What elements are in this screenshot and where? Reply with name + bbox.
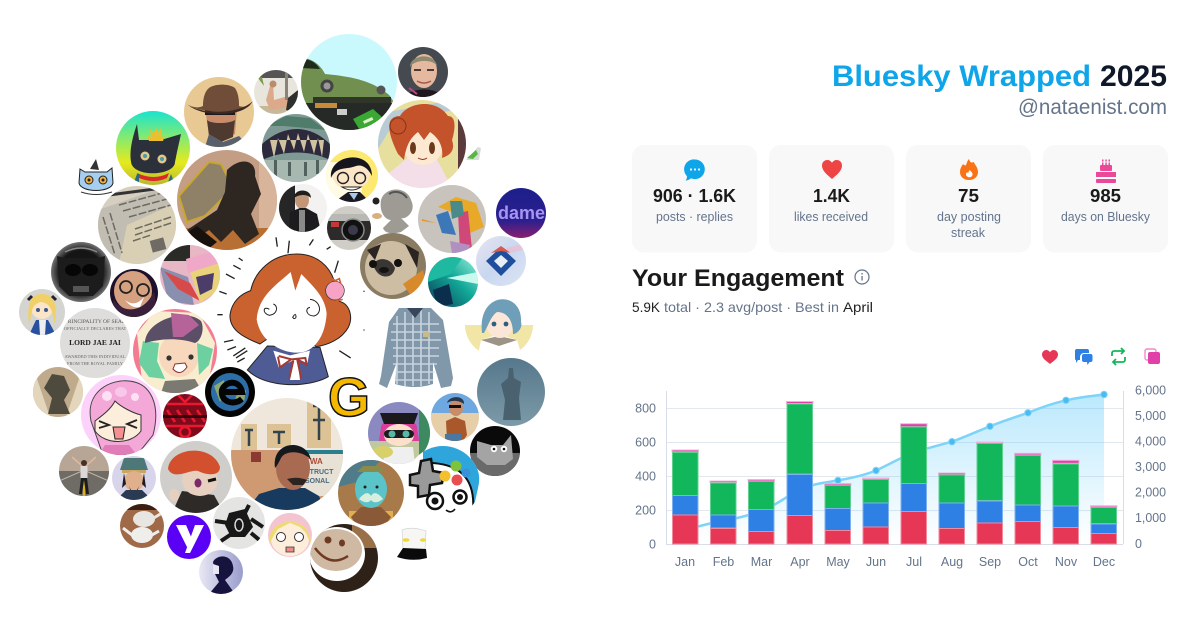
panel: days on Bluesky	[1043, 145, 1168, 252]
avatar: paper certificate: PRINCIPALITY OF SEAL	[65, 319, 126, 325]
avatar: magazines	[160, 245, 220, 305]
sticker: grey creature	[372, 190, 413, 233]
avatar: zhuge warrior	[112, 456, 156, 500]
heading: Your Engagement: Your Engagement	[632, 265, 844, 292]
label line 2: streak	[951, 225, 985, 240]
stacked bars: likes	[672, 512, 1116, 544]
left axis labels: 200	[635, 504, 656, 518]
panel: day posting streak	[906, 145, 1031, 252]
icon: reposts arrows	[1112, 348, 1125, 365]
avatar: smiley coffee	[309, 524, 378, 592]
avatar: cowboy	[184, 77, 254, 147]
avatar: blonde shocked anime	[268, 513, 312, 557]
icon: heart	[822, 160, 842, 179]
icon: replies chat	[1075, 349, 1092, 365]
avatar: red hat figure	[160, 441, 232, 513]
month labels: Feb	[713, 555, 734, 569]
avatar: teapots	[120, 504, 164, 548]
avatar: blonde anime	[19, 289, 65, 335]
cumulative area	[685, 394, 1104, 544]
right axis labels: 0	[1135, 537, 1142, 551]
label: days on Bluesky	[1061, 209, 1150, 224]
month labels: Jan	[675, 555, 695, 569]
avatar: film director photo: SONAL	[305, 478, 330, 485]
avatar: man on highway	[59, 446, 109, 496]
avatar: dark portrait	[199, 550, 243, 594]
icon: info	[855, 270, 869, 284]
panel: likes received	[769, 145, 894, 252]
right axis labels: 6,000	[1135, 384, 1166, 398]
avatar: pixel cat in dark	[470, 426, 520, 477]
stacked bars: quotes	[672, 402, 1117, 507]
value: 906 · 1.6K	[653, 186, 736, 206]
avatar: pink hair anime	[81, 375, 161, 455]
item: plaid shirt	[379, 308, 453, 388]
cumulative line	[685, 394, 1104, 530]
avatar: statue	[33, 367, 83, 417]
avatar: paper certificate: OFFICIALLY DECLARES THAT	[64, 326, 127, 331]
title: 2025	[1100, 60, 1167, 93]
left axis labels: 400	[635, 470, 656, 484]
month labels: Oct	[1018, 555, 1038, 569]
icon: quotes squares	[1145, 349, 1160, 364]
left axis labels: 600	[635, 436, 656, 450]
month labels: Jul	[906, 555, 922, 569]
month labels: Jun	[866, 555, 886, 569]
month labels: May	[826, 555, 851, 569]
line points	[835, 391, 1107, 484]
right axis labels: 1,000	[1135, 511, 1166, 525]
avatar: glasses chibi	[326, 150, 378, 202]
sticker: small green leaf	[466, 147, 481, 160]
stacked bars: replies	[672, 474, 1116, 534]
handle: @nataenist.com	[1018, 96, 1167, 119]
stacked bars: reposts	[672, 404, 1116, 524]
panel: posts and replies	[632, 145, 757, 252]
left axis labels: 800	[635, 402, 656, 416]
engagement chart	[635, 384, 1166, 569]
avatar: masked splat girl	[368, 402, 430, 464]
left axis labels: 0	[649, 538, 656, 552]
avatar: dame logo: dame	[498, 203, 545, 223]
value: 985	[1090, 186, 1121, 206]
label: posts · replies	[656, 209, 733, 224]
avatar: paper certificate: LORD JAE JAI	[69, 338, 121, 347]
avatar: teal abstract	[428, 257, 478, 307]
avatar: earth e	[205, 367, 255, 417]
avatar: blue mustache character	[338, 460, 404, 526]
avatar: film director photo	[231, 398, 343, 510]
label: likes received	[794, 209, 868, 224]
month labels: Aug	[941, 555, 963, 569]
avatar: controller face	[408, 446, 480, 513]
avatar: paper certificate: FROM THE ROYAL FAMILY	[67, 361, 124, 366]
avatar: smiling man with glasses	[110, 269, 158, 317]
avatar: black skull helmet	[51, 242, 111, 302]
sticker: white ghost	[397, 528, 427, 560]
avatar: redhead anime	[378, 100, 466, 188]
avatar: paper certificate	[60, 308, 130, 378]
engagement summary: 5.9K	[632, 299, 661, 315]
value: 75	[958, 186, 979, 206]
avatar: cat with crown	[116, 111, 190, 185]
month labels: Mar	[751, 555, 772, 569]
icon: cake	[1096, 160, 1116, 183]
icon: flame	[960, 159, 978, 180]
right axis labels: 5,000	[1135, 409, 1166, 423]
avatar: green porsche	[301, 34, 397, 132]
avatar: blue-haired anime	[465, 299, 533, 360]
avatar cloud	[19, 34, 546, 594]
month labels: Sep	[979, 555, 1001, 569]
avatar: colourful elephant	[418, 185, 486, 253]
avatar: purple V logo	[167, 515, 211, 559]
avatar: diamond logo	[476, 236, 526, 286]
avatar: film director photo: STRUCT	[305, 469, 334, 476]
right axis labels	[1135, 384, 1166, 551]
avatar: bald man	[398, 47, 448, 97]
month labels: Dec	[1093, 555, 1115, 569]
avatar: film director photo: TWA	[305, 457, 323, 466]
avatar: paper certificate: AWARDED THIS INDIVIDUAL	[64, 354, 126, 359]
logo: letter G: G	[328, 366, 370, 428]
avatar: green-haired girl	[133, 309, 217, 393]
avatar: pug	[360, 233, 426, 299]
icon: chat bubble	[684, 159, 705, 180]
right axis labels: 3,000	[1135, 460, 1166, 474]
month labels	[675, 555, 1115, 569]
icon: likes heart	[1042, 350, 1058, 364]
avatar: teeth monster	[262, 114, 330, 182]
left axis labels	[635, 402, 656, 552]
avatar: man in black jacket	[279, 184, 327, 232]
right axis labels: 2,000	[1135, 486, 1166, 500]
avatar: dame logo	[496, 188, 546, 238]
right axis labels: 4,000	[1135, 434, 1166, 448]
sticker: blue cat with hat	[79, 159, 113, 194]
legend icons	[1042, 348, 1160, 365]
main character: orange-haired girl	[217, 237, 365, 385]
avatar: robot figure	[177, 150, 277, 250]
value: 1.4K	[813, 186, 850, 206]
label: day posting	[937, 209, 1001, 224]
engagement summary: April	[843, 299, 873, 315]
engagement summary: total · 2.3 avg/post · Best in	[664, 299, 839, 315]
avatar: camera	[327, 206, 371, 250]
avatar: newspaper	[98, 186, 176, 264]
month labels: Nov	[1055, 555, 1078, 569]
avatar: woman on beach	[431, 393, 479, 441]
title: Bluesky Wrapped	[832, 60, 1091, 93]
avatar: misty figure	[477, 358, 545, 426]
avatar: beach woman	[254, 70, 298, 116]
avatar: red neon	[163, 394, 207, 438]
month labels: Apr	[790, 555, 810, 569]
avatar: black mech sketch	[213, 497, 265, 549]
